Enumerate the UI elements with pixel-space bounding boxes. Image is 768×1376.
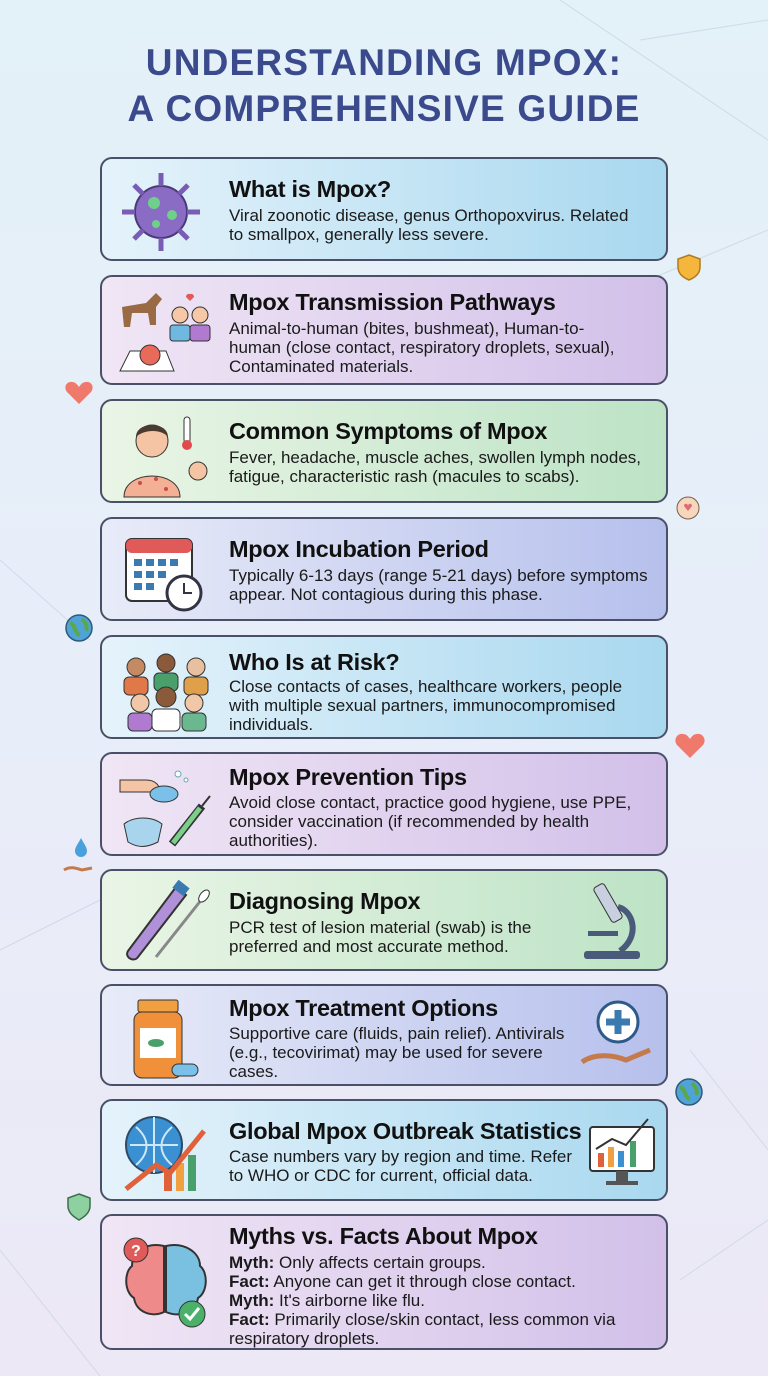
text: human (close contact, respiratory droplets, sexual), xyxy=(229,338,615,357)
icon: heart decoration xyxy=(65,382,93,404)
text xyxy=(229,918,531,956)
text: with multiple sexual partners, immunocompromised xyxy=(229,696,615,715)
heading: Mpox Prevention Tips xyxy=(229,764,467,790)
text xyxy=(229,448,641,486)
heading: Who Is at Risk? xyxy=(229,649,399,675)
text: preferred and most accurate method. xyxy=(229,937,509,956)
icon: group of people xyxy=(124,654,208,732)
text: Close contacts of cases, healthcare workers, people xyxy=(229,677,622,696)
text: Fact: Anyone can get it through close contact. xyxy=(229,1272,576,1291)
text xyxy=(229,566,648,604)
heading: Myths vs. Facts About Mpox xyxy=(229,1223,538,1249)
icon: calendar clock xyxy=(125,538,202,612)
text: cases. xyxy=(229,1062,278,1081)
heading: Mpox Transmission Pathways xyxy=(229,289,556,315)
text: consider vaccination (if recommended by health xyxy=(229,812,589,831)
text: Contaminated materials. xyxy=(229,357,413,376)
panel: what is mpox xyxy=(100,157,668,261)
panel: statistics xyxy=(100,1099,668,1201)
panel: who is at risk xyxy=(100,635,668,739)
panel: myths vs facts xyxy=(100,1214,668,1350)
text: fatigue, characteristic rash (macules to scabs). xyxy=(229,467,580,486)
text xyxy=(229,1024,564,1081)
text: Viral zoonotic disease, genus Orthopoxvirus. Related xyxy=(229,206,628,225)
icon: shield decoration xyxy=(677,254,701,281)
icon: transmission xyxy=(119,293,210,372)
text xyxy=(229,677,622,734)
heading: Mpox Treatment Options xyxy=(229,995,498,1021)
icon: head decoration xyxy=(676,496,700,520)
text: Fever, headache, muscle aches, swollen lymph nodes, xyxy=(229,448,641,467)
panel: prevention xyxy=(100,752,668,856)
text: Supportive care (fluids, pain relief). Antivirals xyxy=(229,1024,564,1043)
text xyxy=(229,1147,572,1185)
text: Myth: Only affects certain groups. xyxy=(229,1253,486,1272)
text xyxy=(229,206,628,244)
text: appear. Not contagious during this phase. xyxy=(229,585,543,604)
panel: incubation xyxy=(100,517,668,621)
text: to WHO or CDC for current, official data. xyxy=(229,1166,533,1185)
text: Myth: It's airborne like flu. xyxy=(229,1291,425,1310)
icon: hand with cross xyxy=(580,1000,651,1064)
text: respiratory droplets. xyxy=(229,1329,379,1348)
heading: Global Mpox Outbreak Statistics xyxy=(229,1118,581,1144)
text: individuals. xyxy=(229,715,313,734)
text: authorities). xyxy=(229,831,318,850)
heading: What is Mpox? xyxy=(229,176,391,202)
heading: Diagnosing Mpox xyxy=(229,888,420,914)
text: Animal-to-human (bites, bushmeat), Human-to- xyxy=(229,319,584,338)
heading: Common Symptoms of Mpox xyxy=(229,418,547,444)
icon: monitor chart xyxy=(589,1118,655,1185)
icon: globe decoration xyxy=(65,614,93,642)
icon: globe decoration 2 xyxy=(675,1078,703,1106)
icon: symptoms person xyxy=(124,416,208,498)
icon: shield decoration green xyxy=(67,1193,91,1221)
heading: Mpox Incubation Period xyxy=(229,536,489,562)
title: UNDERSTANDING MPOX: xyxy=(146,42,622,83)
text: PCR test of lesion material (swab) is the xyxy=(229,918,531,937)
text xyxy=(229,319,615,376)
icon: water drop hand xyxy=(63,838,92,872)
icon: brain check: ? xyxy=(131,1243,141,1260)
panel: transmission xyxy=(100,275,668,385)
text: Avoid close contact, practice good hygiene, use PPE, xyxy=(229,793,631,812)
title xyxy=(127,42,641,129)
text: (e.g., tecovirimat) may be used for severe xyxy=(229,1043,543,1062)
text xyxy=(229,793,631,850)
icon: microscope xyxy=(584,883,640,959)
text xyxy=(229,1253,616,1348)
icon: handwashing mask syringe xyxy=(120,770,211,847)
panel: treatment xyxy=(100,984,668,1086)
text: Case numbers vary by region and time. Refer xyxy=(229,1147,572,1166)
panel: diagnosing xyxy=(100,869,668,971)
text: Typically 6-13 days (range 5-21 days) before symptoms xyxy=(229,566,648,585)
panel: symptoms xyxy=(100,399,668,503)
icon: swab tube xyxy=(126,880,210,960)
title: A COMPREHENSIVE GUIDE xyxy=(127,88,641,129)
icon: virus xyxy=(122,173,200,251)
icon: heart decoration right xyxy=(675,734,705,758)
icon: globe chart xyxy=(124,1116,206,1191)
text: Fact: Primarily close/skin contact, less common via xyxy=(229,1310,615,1329)
icon: brain check xyxy=(124,1238,207,1328)
text: to smallpox, generally less severe. xyxy=(229,225,489,244)
icon: pill bottle xyxy=(134,1000,198,1078)
